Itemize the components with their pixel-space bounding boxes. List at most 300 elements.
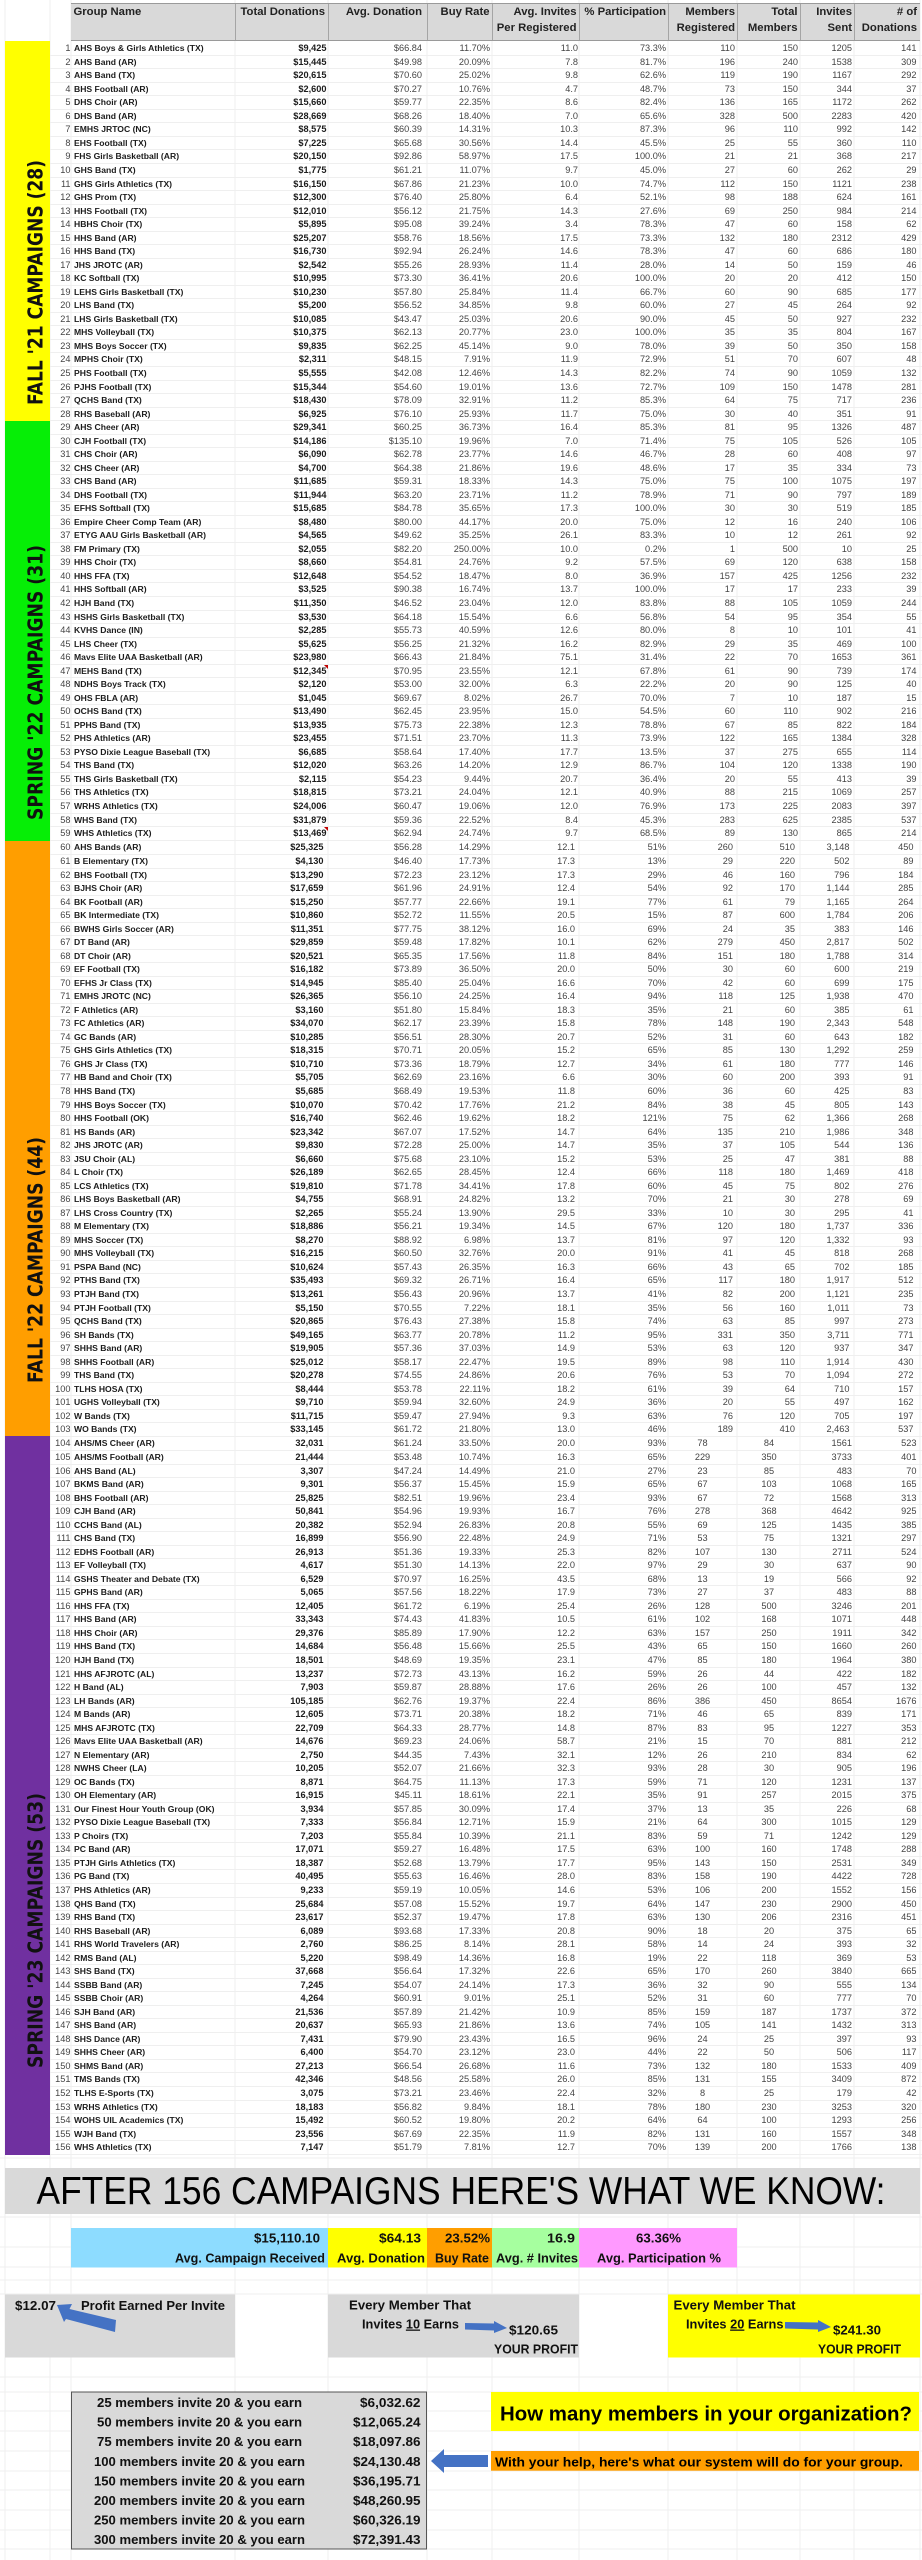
table rows: Fall '22 campaigns: 170	[780, 883, 795, 893]
table rows: Spring '23 campaigns: EF Volleyball (TX)	[74, 1560, 146, 1570]
table rows: Fall '21 campaigns: 46.7%	[640, 449, 666, 459]
table rows: Fall '21 campaigns: 31.4%	[640, 652, 666, 662]
table rows: Spring '23 campaigns: 21,444	[295, 1452, 324, 1462]
table rows: Fall '22 campaigns: 69%	[648, 924, 666, 934]
table rows: Spring '23 campaigns: 180	[761, 1655, 777, 1665]
table rows: Fall '22 campaigns: 37.03%	[459, 1343, 490, 1353]
table rows: Spring '23 campaigns: P Choirs (TX)	[74, 1831, 128, 1841]
table rows: Fall '22 campaigns: 22.66%	[459, 897, 490, 907]
table rows: Fall '22 campaigns: $11,715	[291, 1411, 324, 1421]
table rows: Spring '23 campaigns: 27,213	[295, 2061, 324, 2071]
table rows: Fall '22 campaigns: 94%	[648, 991, 666, 1001]
table rows: Spring '23 campaigns: 26.83%	[459, 1520, 490, 1530]
table rows: Spring '23 campaigns: 9.01%	[464, 1993, 490, 2003]
stat: buy rate: Buy Rate	[435, 2250, 489, 2266]
table rows: Fall '21 campaigns: 132	[720, 233, 735, 243]
table rows: Fall '21 campaigns: 21	[788, 151, 798, 161]
table rows: Fall '21 campaigns: Empire Cheer Comp Team (AR)	[74, 517, 201, 527]
table rows: Spring '23 campaigns: $61.72	[394, 1601, 422, 1611]
table rows: Spring '23 campaigns: 6,529	[300, 1574, 324, 1584]
table rows: Fall '22 campaigns: 30	[785, 1208, 795, 1218]
table rows: Fall '21 campaigns: 20.6	[560, 314, 578, 324]
table rows: Fall '22 campaigns: 15.2	[557, 1154, 575, 1164]
table rows: Fall '21 campaigns: 19.01%	[459, 382, 490, 392]
table rows: Spring '23 campaigns: $45.11	[395, 1790, 422, 1800]
table rows: Spring '23 campaigns: 24.9	[557, 1533, 575, 1543]
table rows: Spring '23 campaigns: TMS Bands (TX)	[74, 2074, 140, 2084]
table rows: Spring '23 campaigns: 108	[55, 1493, 70, 1503]
table rows: Fall '21 campaigns: $62.94	[394, 828, 422, 838]
table rows: Fall '22 campaigns: 14.7	[557, 1127, 575, 1137]
table rows: Spring '23 campaigns: 33.50%	[459, 1438, 490, 1448]
table rows: Fall '21 campaigns: $58.64	[394, 747, 422, 757]
table rows: Spring '23 campaigns: 111	[57, 1533, 70, 1543]
table rows: Spring '23 campaigns: 422	[837, 1668, 852, 1678]
table rows: Fall '22 campaigns: 162	[898, 1397, 914, 1407]
table rows: Spring '23 campaigns: 4642	[832, 1506, 852, 1516]
table rows: Fall '21 campaigns: 27	[60, 395, 70, 405]
table rows: Spring '23 campaigns: 9,301	[300, 1479, 324, 1489]
table rows: Spring '23 campaigns: HHS FFA (TX)	[74, 1601, 130, 1611]
table rows: Spring '23 campaigns: 23.46%	[459, 2088, 490, 2098]
table rows: Fall '21 campaigns: 39	[725, 341, 735, 351]
table rows: Fall '21 campaigns: 292	[901, 70, 916, 80]
table rows: Spring '23 campaigns: 118	[762, 1953, 776, 1963]
table rows: Spring '23 campaigns: 83%	[648, 1831, 666, 1841]
table rows: Fall '21 campaigns: 1256	[832, 571, 852, 581]
table rows: Fall '21 campaigns: $2,120	[298, 679, 326, 689]
table rows: Spring '23 campaigns: 67	[697, 1479, 708, 1489]
table rows: Fall '21 campaigns: GHS Band (TX)	[74, 165, 136, 175]
table rows: Fall '21 campaigns: 25	[725, 138, 735, 148]
table rows: Spring '23 campaigns: 20,637	[295, 2020, 324, 2030]
table rows: Fall '21 campaigns: $13,490	[293, 706, 326, 716]
table rows: Fall '22 campaigns: 16.4	[557, 991, 575, 1001]
table rows: Fall '21 campaigns: 26.7	[560, 693, 578, 703]
table rows: Fall '22 campaigns: 64%	[648, 1127, 666, 1137]
table rows: Fall '22 campaigns: 93	[60, 1289, 70, 1299]
panel: member earnings table: $18,097.86	[353, 2434, 420, 2449]
table rows: Spring '23 campaigns: 59	[697, 1831, 708, 1841]
table rows: Spring '23 campaigns: 53	[697, 1533, 708, 1543]
table rows: Spring '23 campaigns: 25	[764, 2034, 774, 2044]
table rows: Spring '23 campaigns: SHS Band (TX)	[74, 1966, 135, 1976]
table rows: Fall '21 campaigns: $54.60	[394, 382, 422, 392]
table rows: Fall '22 campaigns: 710	[834, 1384, 850, 1394]
table rows: Fall '22 campaigns: 45	[785, 1100, 795, 1110]
table rows: Spring '23 campaigns: 1015	[832, 1817, 852, 1827]
table rows: Spring '23 campaigns: 7,147	[300, 2142, 324, 2152]
table rows: Fall '21 campaigns: $66.84	[394, 43, 422, 53]
table rows: Fall '22 campaigns: 268	[898, 1248, 914, 1258]
table rows: Fall '22 campaigns: 26.35%	[459, 1262, 490, 1272]
table rows: Spring '23 campaigns: 68	[906, 1804, 916, 1814]
table rows: Fall '22 campaigns: 383	[834, 924, 850, 934]
table rows: Fall '22 campaigns: 937	[834, 1343, 850, 1353]
table rows: Fall '21 campaigns: $7,225	[298, 138, 326, 148]
table rows: Spring '23 campaigns: 278	[695, 1506, 710, 1516]
table rows: Fall '22 campaigns: 41%	[648, 1289, 666, 1299]
table rows: Fall '22 campaigns: QCHS Band (TX)	[74, 1316, 142, 1326]
table rows: Fall '21 campaigns: 177	[901, 287, 916, 297]
table rows: Spring '23 campaigns: 10.05%	[459, 1885, 490, 1895]
table rows: Fall '22 campaigns: 25.00%	[459, 1140, 490, 1150]
table rows: Fall '22 campaigns: $23,342	[290, 1127, 324, 1137]
table rows: Spring '23 campaigns: CCHS Band (AL)	[74, 1520, 142, 1530]
table rows: Spring '23 campaigns: 8654	[832, 1696, 852, 1706]
table rows: Spring '23 campaigns: 58.7	[557, 1736, 575, 1746]
table rows: Spring '23 campaigns: 139	[695, 2142, 710, 2152]
table rows: Spring '23 campaigns: 13.6	[557, 2020, 575, 2030]
table rows: Fall '21 campaigns: 22.52%	[459, 814, 490, 824]
table rows: Spring '23 campaigns: 170	[695, 1966, 710, 1976]
table rows: Fall '22 campaigns: 53%	[648, 1343, 666, 1353]
table rows: Fall '21 campaigns: 98	[725, 192, 735, 202]
table rows: Fall '22 campaigns: 24.9	[557, 1397, 575, 1407]
table rows: Fall '22 campaigns: 21	[723, 1005, 733, 1015]
table rows: Fall '22 campaigns: 29%	[648, 870, 666, 880]
table rows: Fall '21 campaigns: 190	[901, 760, 916, 770]
table rows: Fall '21 campaigns: 23.70%	[459, 733, 490, 743]
table rows: Spring '23 campaigns: 17.90%	[459, 1628, 490, 1638]
table rows: Spring '23 campaigns: 5,220	[300, 1953, 324, 1963]
table rows: Fall '21 campaigns: 47	[60, 666, 70, 676]
table rows: Fall '21 campaigns: 74	[725, 368, 735, 378]
table rows: Fall '21 campaigns: $15,660	[293, 97, 326, 107]
table rows: Spring '23 campaigns: 409	[901, 2061, 916, 2071]
table rows: Spring '23 campaigns: PG Band (TX)	[74, 1871, 129, 1881]
table rows: Fall '21 campaigns: 17.5	[560, 233, 578, 243]
table rows: Fall '21 campaigns: 30	[725, 503, 735, 513]
table rows: Fall '22 campaigns: $56.10	[394, 991, 422, 1001]
table rows: Spring '23 campaigns: 26	[697, 1750, 708, 1760]
table rows: Spring '23 campaigns: 36%	[648, 1980, 666, 1990]
table rows: Fall '22 campaigns: WO Bands (TX)	[74, 1424, 137, 1434]
table rows: Fall '21 campaigns: DHS Band (AR)	[74, 111, 137, 121]
table rows: Fall '21 campaigns: $20,615	[293, 70, 326, 80]
table rows: Fall '21 campaigns: 9.0	[565, 341, 578, 351]
table rows: Fall '22 campaigns: 79	[60, 1100, 70, 1110]
table rows: Fall '21 campaigns: 607	[837, 354, 852, 364]
table rows: Fall '21 campaigns: 18	[60, 273, 70, 283]
table rows: Spring '23 campaigns: 134	[55, 1844, 70, 1854]
table header: Avg. Invites	[514, 6, 576, 18]
table rows: Spring '23 campaigns: 12,605	[295, 1709, 324, 1719]
table rows: Fall '22 campaigns: 89%	[648, 1357, 666, 1367]
table rows: Spring '23 campaigns: 7.81%	[464, 2142, 490, 2152]
table rows: Spring '23 campaigns: 397	[837, 2034, 852, 2044]
table rows: Fall '22 campaigns: 348	[898, 1127, 914, 1137]
table rows: Spring '23 campaigns: 17.8	[557, 1912, 575, 1922]
table rows: Fall '21 campaigns: 28.0%	[640, 260, 666, 270]
table rows: Spring '23 campaigns: $51.30	[394, 1560, 422, 1570]
table rows: Fall '22 campaigns: HB Band and Choir (TX)	[74, 1072, 172, 1082]
table rows: Spring '23 campaigns: 23.4	[557, 1493, 575, 1503]
table rows: Spring '23 campaigns: $60.52	[394, 2115, 422, 2125]
table rows: Fall '22 campaigns: $15,250	[290, 897, 324, 907]
table rows: Fall '22 campaigns: 90	[60, 1248, 70, 1258]
table rows: Fall '21 campaigns: 45	[60, 639, 70, 649]
table rows: Fall '21 campaigns: PHS Football (TX)	[74, 368, 147, 378]
table rows: Fall '21 campaigns: $5,200	[298, 300, 326, 310]
table rows: Fall '21 campaigns: 73.3%	[640, 43, 666, 53]
table rows: Fall '22 campaigns: 73	[903, 1302, 914, 1312]
table rows: Spring '23 campaigns: $60.91	[394, 1993, 422, 2003]
table header: % Participation	[584, 6, 666, 18]
table rows: Fall '21 campaigns: 90	[788, 666, 798, 676]
table rows: Spring '23 campaigns: 18,501	[295, 1655, 324, 1665]
table rows: Spring '23 campaigns: 200	[761, 2142, 777, 2152]
table rows: Fall '22 campaigns: 16.6	[557, 978, 575, 988]
table rows: Fall '21 campaigns: 61	[725, 666, 735, 676]
table rows: Fall '21 campaigns: $56.25	[394, 639, 422, 649]
table rows: Fall '21 campaigns: 51	[725, 354, 735, 364]
table rows: Fall '21 campaigns: HHS Band (TX)	[74, 246, 135, 256]
table rows: Fall '21 campaigns: WHS Athletics (TX)	[74, 828, 152, 838]
table rows: Fall '22 campaigns: 85	[60, 1181, 70, 1191]
table rows: Fall '21 campaigns: 17.40%	[459, 747, 490, 757]
table rows: Fall '22 campaigns: $85.40	[394, 978, 422, 988]
table rows: Spring '23 campaigns: 112	[56, 1547, 70, 1557]
table rows: Spring '23 campaigns: 50,841	[295, 1506, 324, 1516]
table rows: Spring '23 campaigns: SHS Dance (AR)	[74, 2034, 140, 2044]
table rows: Spring '23 campaigns: SJH Band (AR)	[74, 2007, 135, 2017]
table rows: Spring '23 campaigns: 18,387	[295, 1858, 324, 1868]
table rows: Fall '21 campaigns: $59.77	[394, 97, 422, 107]
table rows: Fall '22 campaigns: 331	[718, 1330, 733, 1340]
table rows: Spring '23 campaigns: 20.0	[557, 1438, 575, 1448]
table rows: Fall '21 campaigns: 685	[837, 287, 852, 297]
table rows: Spring '23 campaigns: 83%	[648, 1871, 666, 1881]
table rows: Fall '21 campaigns: 12	[788, 530, 798, 540]
table rows: Fall '21 campaigns: $48.15	[394, 354, 422, 364]
table rows: Fall '21 campaigns: 50	[788, 341, 798, 351]
stat: average campaign received: $15,110.10	[254, 2230, 320, 2246]
table rows: Fall '21 campaigns: $69.67	[394, 693, 422, 703]
table rows: Fall '21 campaigns: 119	[720, 70, 735, 80]
table rows: Fall '21 campaigns: GHS Prom (TX)	[74, 192, 136, 202]
table rows: Fall '21 campaigns: $71.51	[394, 733, 422, 743]
table rows: Spring '23 campaigns: $65.93	[394, 2020, 422, 2030]
table rows: Fall '21 campaigns: $2,542	[298, 260, 326, 270]
table rows: Spring '23 campaigns: $48.56	[394, 2074, 422, 2084]
table rows: Fall '21 campaigns: 12.6	[560, 625, 578, 635]
table rows: Fall '21 campaigns: 45.3%	[640, 814, 666, 824]
table rows: Fall '21 campaigns: $135.10	[389, 436, 422, 446]
table rows: Fall '22 campaigns: 37	[723, 1140, 733, 1150]
table rows: Spring '23 campaigns: 10.39%	[459, 1831, 490, 1841]
table rows: Fall '21 campaigns: 28	[725, 449, 735, 459]
table rows: Fall '22 campaigns: 23.39%	[459, 1018, 490, 1028]
table rows: Fall '21 campaigns: 20.77%	[459, 327, 490, 337]
table rows: Fall '21 campaigns: 17	[788, 584, 798, 594]
table rows: Spring '23 campaigns: 83	[697, 1723, 708, 1733]
table rows: Spring '23 campaigns: $82.51	[394, 1493, 422, 1503]
table rows: Fall '22 campaigns: $46.40	[394, 856, 422, 866]
table rows: Fall '22 campaigns: 24.91%	[459, 883, 490, 893]
table rows: Fall '21 campaigns: 1121	[832, 179, 852, 189]
table rows: Fall '21 campaigns: 20.6	[560, 273, 578, 283]
table rows: Fall '22 campaigns: 29.5	[557, 1208, 575, 1218]
table rows: Spring '23 campaigns: 196	[901, 1763, 916, 1773]
callout: with your help	[491, 2451, 919, 2471]
table rows: Fall '22 campaigns: 15.8	[557, 1018, 575, 1028]
table rows: Spring '23 campaigns: M Bands (AR)	[74, 1709, 130, 1719]
table rows: Spring '23 campaigns: $72.73	[394, 1668, 422, 1678]
table rows: Fall '21 campaigns: WRHS Athletics (TX)	[74, 801, 158, 811]
table rows: Fall '21 campaigns: 82.9%	[640, 639, 666, 649]
table rows: Spring '23 campaigns: 151	[55, 2074, 70, 2084]
table rows: Spring '23 campaigns: 103	[761, 1479, 777, 1489]
table rows: Spring '23 campaigns: SHHS Cheer (AR)	[74, 2047, 145, 2057]
table rows: Fall '22 campaigns: 50%	[648, 964, 666, 974]
table rows: Spring '23 campaigns: 159	[695, 2007, 710, 2017]
table rows: Fall '22 campaigns: $56.51	[394, 1032, 422, 1042]
table rows: Fall '22 campaigns: 19.53%	[459, 1086, 490, 1096]
table rows: Fall '21 campaigns: 180	[783, 233, 798, 243]
table rows: Fall '22 campaigns: 83	[903, 1086, 914, 1096]
table rows: Fall '22 campaigns: 102	[55, 1411, 70, 1421]
table rows: Fall '21 campaigns: CHS Choir (AR)	[74, 449, 138, 459]
table rows: Fall '22 campaigns: $25,325	[290, 842, 324, 852]
table rows: Fall '22 campaigns: 60	[785, 978, 795, 988]
table rows: Spring '23 campaigns: 21.0	[557, 1466, 575, 1476]
table rows: Fall '22 campaigns: 99	[60, 1370, 70, 1380]
table rows: Fall '22 campaigns: 64	[785, 1384, 795, 1394]
table rows: Fall '22 campaigns: THS Band (TX)	[74, 1370, 134, 1380]
table rows: Spring '23 campaigns: 1552	[832, 1885, 852, 1895]
table rows: Spring '23 campaigns: 14,684	[295, 1641, 324, 1651]
table rows: Fall '22 campaigns: 13.0	[557, 1424, 575, 1434]
table rows: Spring '23 campaigns: 14	[697, 1939, 708, 1949]
table rows: Spring '23 campaigns: 11.9	[558, 2129, 575, 2139]
table rows: Fall '21 campaigns: 397	[901, 801, 916, 811]
table rows: Fall '21 campaigns: $61.21	[394, 165, 422, 175]
table rows: Fall '22 campaigns: $59.48	[394, 937, 422, 947]
table rows: Spring '23 campaigns: 30.09%	[459, 1804, 490, 1814]
table rows: Fall '21 campaigns: 24	[60, 354, 70, 364]
table rows: Fall '22 campaigns: 185	[898, 1262, 914, 1272]
table rows: Fall '21 campaigns: 35	[788, 463, 798, 473]
table rows: Spring '23 campaigns: 7,431	[300, 2034, 324, 2044]
table rows: Fall '21 campaigns: 232	[901, 314, 916, 324]
table rows: Fall '21 campaigns: $18,815	[293, 787, 326, 797]
table rows: Fall '21 campaigns: 12.46%	[459, 368, 490, 378]
table rows: Fall '21 campaigns: 17	[725, 584, 735, 594]
table rows: Spring '23 campaigns: 136	[55, 1871, 70, 1881]
table rows: Fall '21 campaigns: 35	[788, 639, 798, 649]
table rows: Fall '22 campaigns: 60	[60, 842, 70, 852]
table rows: Spring '23 campaigns: 65%	[648, 1966, 666, 1976]
table rows: Spring '23 campaigns: 22.48%	[459, 1533, 490, 1543]
table rows: Spring '23 campaigns: WOHS UIL Academics (TX)	[74, 2115, 183, 2125]
table rows: Spring '23 campaigns: 15.45%	[459, 1479, 490, 1489]
table rows: Fall '22 campaigns: 64	[60, 897, 70, 907]
table rows: Fall '22 campaigns: 28.30%	[459, 1032, 490, 1042]
table rows: Spring '23 campaigns: $48.69	[394, 1655, 422, 1665]
table rows: Fall '21 campaigns: 100.0%	[635, 503, 666, 513]
table rows: Spring '23 campaigns: 65	[906, 1926, 916, 1936]
table rows: Fall '22 campaigns: 32.60%	[459, 1397, 490, 1407]
panel: invites 20 earnings: Invites 20 Earns	[686, 2316, 784, 2332]
table rows: Spring '23 campaigns: 15	[697, 1736, 708, 1746]
table rows: Fall '21 campaigns: 35	[725, 327, 735, 337]
table rows: Fall '22 campaigns: 101	[55, 1397, 70, 1407]
table rows: Spring '23 campaigns: 147	[695, 1899, 710, 1909]
table rows: Spring '23 campaigns: 3246	[832, 1601, 852, 1611]
table rows: Fall '22 campaigns: 12.4	[557, 1167, 575, 1177]
table rows: Fall '22 campaigns: 450	[898, 842, 914, 852]
table rows: Spring '23 campaigns: SSBB Band (AR)	[74, 1980, 142, 1990]
table rows: Fall '22 campaigns: 17.3	[557, 856, 575, 866]
table rows: Spring '23 campaigns: 229	[695, 1452, 710, 1462]
table rows: Fall '21 campaigns: 36	[60, 517, 70, 527]
table rows: Fall '21 campaigns: 16.4	[560, 422, 578, 432]
table rows: Fall '21 campaigns: 29	[906, 165, 916, 175]
table rows: Fall '22 campaigns: $34,070	[290, 1018, 324, 1028]
table rows: Fall '21 campaigns: 88	[725, 598, 735, 608]
band: Fall '21 campaigns: FALL '21 CAMPAIGNS (28)	[23, 160, 47, 405]
table rows: Fall '21 campaigns: 0.2%	[645, 544, 666, 554]
table rows: Fall '21 campaigns: 75	[788, 395, 798, 405]
table rows: Spring '23 campaigns: 12.2	[557, 1628, 575, 1638]
table rows: Fall '22 campaigns: 18.2	[557, 1384, 575, 1394]
table rows: Fall '22 campaigns: 276	[898, 1181, 914, 1191]
panel: invites 10 earnings: Every Member That	[349, 2298, 472, 2312]
table rows: Spring '23 campaigns: 42	[906, 2088, 916, 2098]
table rows: Fall '21 campaigns: 283	[720, 814, 735, 824]
table rows: Spring '23 campaigns: 129	[55, 1777, 70, 1787]
table rows: Fall '21 campaigns: OCHS Band (TX)	[74, 706, 142, 716]
table rows: Spring '23 campaigns: 28	[697, 1763, 708, 1773]
table rows: Spring '23 campaigns: 4,617	[300, 1560, 324, 1570]
table rows: Fall '21 campaigns: 9.7	[565, 828, 578, 838]
table rows: Fall '21 campaigns: 14	[725, 260, 735, 270]
table rows: Fall '22 campaigns: 32.76%	[459, 1248, 490, 1258]
panel: member earnings table: 75 members invite 20 & you earn	[97, 2434, 302, 2449]
table rows: Fall '21 campaigns: 8.6	[565, 97, 578, 107]
table rows: Spring '23 campaigns: 13,237	[295, 1668, 324, 1678]
table rows: Fall '22 campaigns: LHS Boys Basketball (AR)	[74, 1194, 180, 1204]
table rows: Fall '21 campaigns: 21	[60, 314, 70, 324]
table rows: Spring '23 campaigns: 401	[901, 1452, 916, 1462]
table rows: Spring '23 campaigns: 120	[55, 1655, 70, 1665]
table rows: Fall '21 campaigns: 71	[725, 490, 735, 500]
table rows: Spring '23 campaigns: 43%	[648, 1641, 666, 1651]
table rows: Spring '23 campaigns: 1293	[832, 2115, 852, 2125]
table rows: Spring '23 campaigns: 53%	[648, 1885, 666, 1895]
table rows: Spring '23 campaigns: 872	[901, 2074, 916, 2084]
table rows: Spring '23 campaigns: 59%	[648, 1668, 666, 1678]
table rows: Spring '23 campaigns: 70	[906, 1993, 916, 2003]
table rows: Spring '23 campaigns: 23.12%	[459, 2047, 490, 2057]
table rows: Fall '22 campaigns: 121%	[642, 1113, 666, 1123]
table rows: Spring '23 campaigns: 26%	[648, 1601, 666, 1611]
table rows: Fall '22 campaigns: $70.55	[394, 1302, 422, 1312]
table rows: Spring '23 campaigns: AHS/MS Football (AR)	[74, 1452, 164, 1462]
table rows: Fall '21 campaigns: $46.52	[394, 598, 422, 608]
table rows: Fall '21 campaigns: 60	[788, 246, 798, 256]
table rows: Fall '21 campaigns: PPHS Band (TX)	[74, 720, 140, 730]
table rows: Fall '22 campaigns: 63	[723, 1343, 733, 1353]
table rows: Spring '23 campaigns: 125	[761, 1520, 777, 1530]
table rows: Fall '21 campaigns: 11.70%	[460, 43, 490, 53]
table rows: Fall '21 campaigns: $2,311	[299, 354, 326, 364]
table rows: Fall '21 campaigns: 87.3%	[640, 124, 666, 134]
table rows: Spring '23 campaigns: 60	[764, 1993, 774, 2003]
table rows: Fall '22 campaigns: 350	[780, 1330, 795, 1340]
table rows: Fall '21 campaigns: 12	[725, 517, 735, 527]
